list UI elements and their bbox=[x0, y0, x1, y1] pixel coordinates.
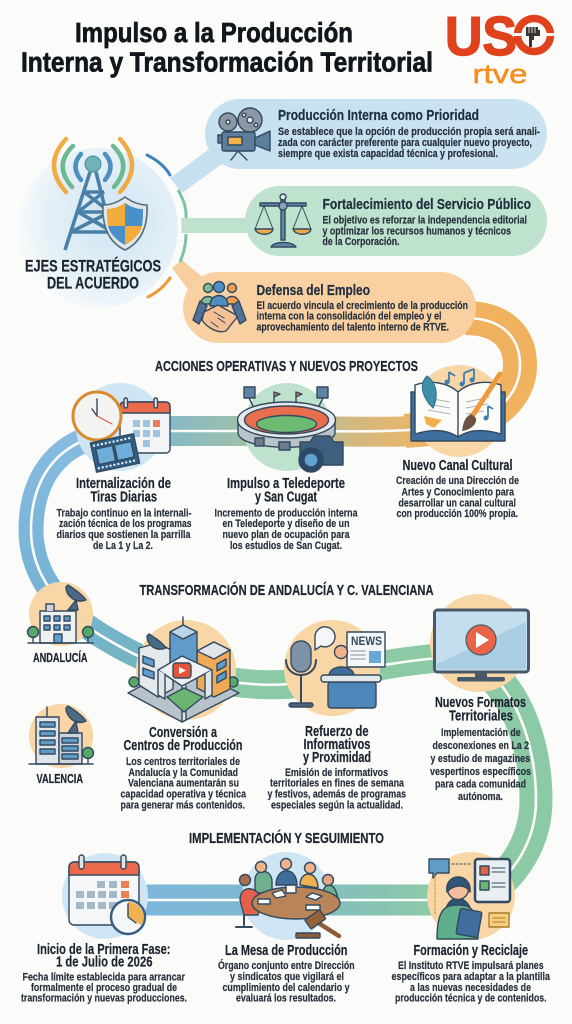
logo: USO rtve: rtve bbox=[472, 59, 528, 89]
body text: los estudios de San Cugat. bbox=[230, 540, 342, 552]
heading: Refuerzo de bbox=[305, 724, 368, 740]
connector ribbon: orange arc bbox=[405, 318, 520, 431]
body text: cumplimiento del calendario y bbox=[222, 982, 350, 994]
logo: USO rtve: O bbox=[520, 53, 521, 55]
icon: shield bbox=[103, 197, 147, 250]
node: Nuevos Formatos Territoriales bbox=[430, 594, 531, 803]
body text: interna con la consolidación del empleo y el bbox=[256, 310, 442, 322]
icon: calendar bbox=[120, 398, 170, 453]
body text bbox=[214, 508, 358, 552]
body text: El objetivo es reforzar la independencia editorial bbox=[322, 214, 527, 226]
icon: film camera bbox=[218, 108, 270, 160]
body text bbox=[278, 126, 540, 160]
hub label: DEL ACUERDO bbox=[47, 274, 139, 292]
heading: Territoriales bbox=[449, 708, 513, 724]
body text: diarios que sostienen la parrilla bbox=[56, 529, 191, 541]
heading: Impulso a Teledeporte bbox=[227, 476, 345, 492]
node: Conversión a Centros de Producción bbox=[120, 617, 247, 811]
body text: formalmente el proceso gradual de bbox=[31, 982, 177, 994]
body text: transformación y nuevas producciones. bbox=[21, 993, 187, 1005]
logo: USO rtve bbox=[445, 5, 557, 89]
icon: clock bbox=[111, 900, 145, 934]
body text: Artes y Conocimiento para bbox=[402, 486, 515, 498]
connector ribbon: right green arc bbox=[480, 678, 536, 897]
icon: signal waves bbox=[54, 139, 132, 192]
heading bbox=[124, 725, 242, 754]
chat bubble bbox=[429, 859, 449, 878]
heading: Centros de Producción bbox=[124, 738, 242, 754]
heading: y San Cugat bbox=[255, 490, 317, 506]
body text: Incremento de producción interna bbox=[214, 508, 358, 520]
logo: USO rtve: US bbox=[445, 5, 517, 67]
heading bbox=[227, 476, 345, 506]
icon: news board bbox=[286, 627, 385, 708]
connector ribbon: implementation band bbox=[100, 884, 480, 916]
speech bubble bbox=[315, 627, 335, 650]
node: Refuerzo de Informativos bbox=[268, 620, 406, 811]
body text: zación técnica de los programas bbox=[59, 518, 192, 530]
icon: news board: NEWS bbox=[351, 634, 382, 648]
body text: desarrollar un canal cultural bbox=[398, 498, 516, 510]
body text: El acuerdo vincula el crecimiento de la producción bbox=[256, 300, 468, 312]
heading: Producción Interna como Prioridad bbox=[278, 107, 479, 124]
icon: feather bbox=[422, 376, 436, 408]
body text: autónoma. bbox=[458, 791, 503, 803]
body text: para cada comunidad bbox=[435, 779, 526, 791]
connector: hub to priority pill bbox=[170, 150, 222, 193]
heading: Nuevo Canal Cultural bbox=[402, 458, 512, 474]
panel: Producción Interna como Prioridad bbox=[205, 99, 547, 169]
node: Andalucía bbox=[28, 582, 94, 665]
body text: Órgano conjunto entre Dirección bbox=[218, 959, 355, 972]
body text: nuevo plan de ocupación para bbox=[222, 529, 350, 541]
heading bbox=[76, 476, 171, 506]
body text: especiales según la actualidad. bbox=[271, 799, 403, 811]
node: Formación y Reciclaje bbox=[392, 852, 551, 1005]
icon: towers with dish bbox=[29, 706, 94, 764]
icon: news desk bbox=[328, 682, 376, 708]
ribbon centre lines bbox=[31, 318, 536, 900]
body text: Trabajo continuo en la internali- bbox=[56, 508, 192, 520]
body text bbox=[218, 959, 355, 1005]
connector ribbon: operations band bbox=[90, 416, 420, 447]
title: Interna y Transformación Territorial bbox=[21, 46, 433, 78]
icon: microphone bbox=[291, 641, 311, 672]
heading: Nuevos Formatos bbox=[435, 695, 526, 711]
icon: calendar bbox=[69, 855, 139, 925]
heading: Formación y Reciclaje bbox=[414, 943, 528, 959]
body text: a las nuevas necesidades de bbox=[410, 982, 531, 994]
body text: territoriales en fines de semana bbox=[270, 778, 405, 790]
node: La Mesa de Producción bbox=[218, 852, 355, 1005]
body text: para generar más contenidos. bbox=[120, 799, 245, 811]
body text: Andalucía y la Comunidad bbox=[128, 767, 238, 779]
icon: round table meeting bbox=[236, 858, 340, 938]
connector: hub to employment pill bbox=[172, 260, 212, 300]
panel: Fortalecimiento del Servicio Público bbox=[245, 186, 547, 256]
node: Valencia bbox=[29, 704, 94, 786]
body text: Emisión de informativos bbox=[285, 767, 388, 779]
heading: transformación: TRANSFORMACIÓN DE ANDALUCÍA Y C. VALENCIANA bbox=[140, 581, 434, 599]
connector: hub to public service pill bbox=[180, 218, 250, 233]
connector ribbon: territorial green band bbox=[200, 655, 480, 685]
body text bbox=[21, 972, 187, 1005]
heading: La Mesa de Producción bbox=[225, 943, 348, 959]
body text bbox=[268, 767, 406, 811]
body text: de la Corporación. bbox=[322, 236, 400, 248]
title: Impulso a la Producción bbox=[75, 17, 353, 48]
heading bbox=[303, 724, 371, 766]
icon: tablet bbox=[429, 859, 510, 939]
icon: open book bbox=[411, 382, 505, 441]
node: Internalización de Tiras Diarias bbox=[56, 383, 192, 552]
woman bbox=[445, 898, 472, 925]
body text: en Teledeporte y diseño de un bbox=[222, 518, 350, 530]
body text: Creación de una Dirección de bbox=[396, 475, 519, 487]
label: VALENCIA bbox=[36, 772, 83, 786]
node: Nuevo Canal Cultural bbox=[396, 365, 519, 520]
body text: siempre que exista capacidad técnica y profesional. bbox=[278, 148, 498, 160]
heading: acciones operativas: ACCIONES OPERATIVAS Y NUEVOS PROYECTOS bbox=[155, 358, 418, 375]
body text: de La 1 y La 2. bbox=[93, 540, 153, 552]
icon: isometric production centre bbox=[128, 617, 239, 722]
body text: desconexiones en La 2 bbox=[432, 740, 529, 752]
icon: clock bbox=[73, 392, 121, 440]
heading: Inicio de la Primera Fase: bbox=[37, 942, 170, 958]
heading: Internalización de bbox=[76, 476, 171, 492]
icon: music notes bbox=[449, 369, 493, 417]
body text: con producción 100% propia. bbox=[396, 508, 518, 520]
icon: building with dish bbox=[28, 585, 94, 643]
icon: handshake and people bbox=[193, 282, 246, 332]
icon: monitor with play bbox=[434, 610, 528, 682]
node: Impulso a Teledeporte y San Cugat bbox=[214, 383, 358, 552]
icon: scales bbox=[255, 194, 311, 247]
body text: vespertinos específicos bbox=[430, 766, 531, 778]
icon: film strip bbox=[90, 434, 140, 472]
icon: photo camera bbox=[299, 436, 343, 472]
panel: hub circle bbox=[16, 139, 186, 310]
body text bbox=[56, 508, 192, 552]
body text: y sindicatos que vigilará el bbox=[230, 971, 344, 983]
body text: Fecha límite establecida para arrancar bbox=[22, 972, 186, 984]
body text: evaluará los resultados. bbox=[236, 993, 336, 1005]
heading: Tiras Diarias bbox=[90, 490, 157, 506]
connector ribbon: blue arc bbox=[31, 438, 195, 674]
icon: antenna tower bbox=[65, 172, 113, 250]
body text: y optimizar los recursos humanos y técnicos bbox=[322, 226, 511, 238]
panel: Defensa del Empleo bbox=[183, 272, 476, 343]
heading bbox=[37, 942, 170, 971]
node: Inicio de la Primera Fase bbox=[21, 853, 187, 1005]
hub label: EJES ESTRATÉGICOS bbox=[25, 256, 161, 276]
body text bbox=[392, 960, 551, 1005]
heading: Conversión a bbox=[149, 725, 218, 741]
body text bbox=[120, 756, 247, 811]
note bbox=[489, 913, 509, 927]
icon: stadium bbox=[238, 387, 336, 450]
body text: y festivos, además de programas bbox=[268, 789, 406, 801]
body text bbox=[322, 214, 527, 248]
body text bbox=[430, 727, 531, 803]
body text: Los centros territoriales de bbox=[126, 756, 240, 768]
body text: Implementación de bbox=[441, 727, 521, 739]
heading: Informativos bbox=[304, 737, 370, 753]
body text bbox=[256, 300, 468, 334]
heading: 1 de Julio de 2026 bbox=[56, 955, 152, 971]
body text bbox=[396, 475, 519, 520]
heading: Defensa del Empleo bbox=[256, 282, 370, 299]
hub ring bbox=[16, 146, 180, 310]
heading: y Proximidad bbox=[303, 750, 371, 766]
label: ANDALUCÍA bbox=[33, 650, 88, 665]
title bbox=[21, 17, 433, 78]
body text: y estudio de magazines bbox=[430, 753, 530, 765]
icon: paintbrush bbox=[462, 374, 500, 431]
heading bbox=[435, 695, 526, 724]
hub label bbox=[25, 256, 161, 292]
body text: aprovechamiento del talento interno de RTVE. bbox=[256, 322, 449, 334]
body text: Valenciana aumentarán su bbox=[128, 778, 239, 790]
icon: presenter bbox=[329, 667, 354, 676]
heading: implementación: IMPLEMENTACIÓN Y SEGUIMIENTO bbox=[189, 829, 384, 847]
body text: capacidad operativa y técnica bbox=[120, 789, 247, 801]
